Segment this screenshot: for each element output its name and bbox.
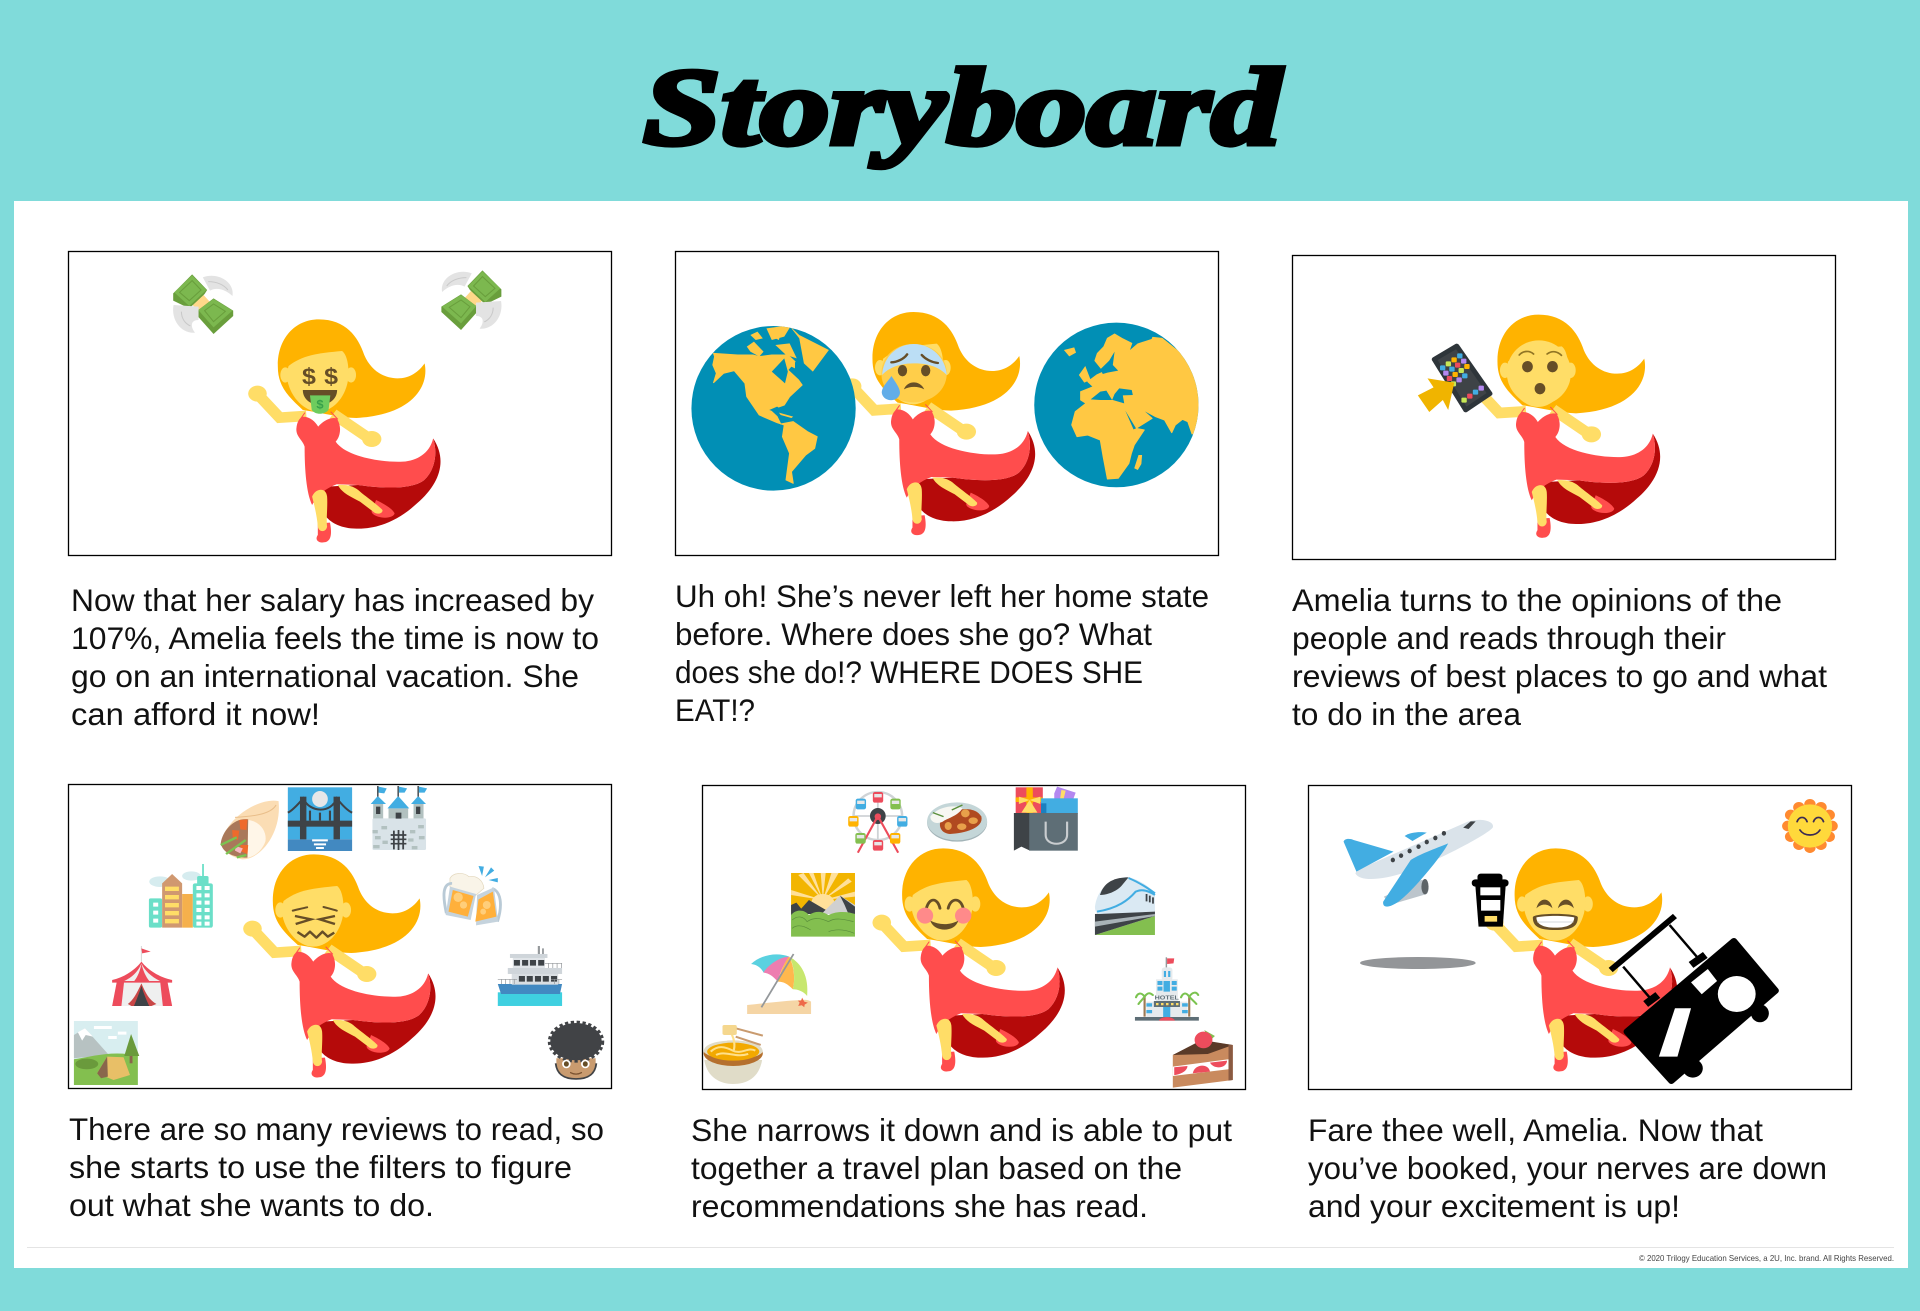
caption: step 1: 107%, Amelia feels the time is now to [71,620,599,656]
icon: night bridge [288,787,352,851]
icon: royal guard [550,1023,602,1079]
frame: step 6 [1308,786,1852,1090]
caption: step 1: go on an international vacation. She [71,658,579,694]
caption: step 3 [1292,582,1827,732]
icon: clinking beer mugs [444,866,500,925]
illustration: dancer with money eyes and flying money: $ [302,364,316,390]
illustration: worried dancer and two globes [691,312,1206,535]
icon: strawberry cake [1173,1030,1233,1088]
title: Storyboard [643,46,1284,168]
caption: step 4: out what she wants to do. [69,1187,434,1223]
icon: airplane taking off [1344,820,1493,907]
illustration: surprised dancer with phone and cursor arrow [1418,315,1660,538]
icon: hotel: HOTEL [1155,995,1179,1001]
caption: step 1: can afford it now! [71,696,320,732]
icon: noodle bowl [704,1025,763,1084]
footer copyright: © 2020 Trilogy Education Services, a 2U, Inc. brand. All Rights Reserved. [1639,1253,1894,1263]
caption: step 5 [691,1112,1232,1224]
caption: step 6: and your excitement is up! [1308,1188,1680,1224]
icon: plane shadow [1360,957,1476,969]
frame: step 3 [1292,256,1836,560]
caption: step 1: Now that her salary has increased by [71,582,594,618]
frame: step 2 [676,252,1218,556]
icon: circus tent [112,946,172,1006]
illustration: dancer with money eyes and flying money: $ [316,398,324,412]
caption: step 5: She narrows it down and is able to put [691,1112,1232,1148]
icon: globe showing the Americas [691,325,856,491]
panel: step 3 reading reviews on phone [1292,256,1836,732]
illustration: excited dancer with coffee, suitcase, plane and sun [1344,799,1838,1081]
icon: hotel [1135,957,1199,1021]
panel: step 1 salary increase [68,252,612,732]
icon: plate of curry [927,802,987,842]
frame: step 1 [68,252,612,556]
icon: smartphone [1434,346,1490,410]
caption: step 6 [1308,1112,1827,1224]
illustration: dancer with money eyes and flying money: $ [324,364,339,390]
icon: cursor arrow [1418,378,1454,412]
icon: ferry ship [498,946,562,1006]
icon: takeaway coffee cup [1472,874,1509,927]
caption: step 4 [69,1111,604,1223]
caption: step 2: EAT!? [675,692,755,728]
caption: step 4: she starts to use the filters to figure [69,1149,572,1185]
caption: step 1 [71,582,599,732]
caption: step 5: together a travel plan based on the [691,1150,1182,1186]
icon: cityscape [149,864,213,928]
icon: smiling sun [1782,799,1838,853]
icon: sunrise over mountains [791,873,855,937]
caption: step 2: Uh oh! She’s never left her home state [675,578,1209,614]
caption: step 5: recommendations she has read. [691,1188,1148,1224]
caption: step 2: does she do!? WHERE DOES SHE [675,654,1143,690]
caption: step 2: before. Where does she go? What [675,616,1152,652]
caption: step 3: to do in the area [1292,696,1521,732]
illustration: overwhelmed dancer surrounded by options [74,786,602,1085]
caption: step 6: you’ve booked, your nerves are down [1308,1150,1827,1186]
frame: step 4 [68,784,612,1088]
caption: step 3: people and reads through their [1292,620,1726,656]
panel: step 2 worried between globes [675,252,1218,728]
icon: beach umbrella [747,954,811,1014]
icon: shopping bag with gifts [1014,787,1078,851]
caption: step 6: Fare thee well, Amelia. Now that [1308,1112,1763,1148]
icon: globe showing Europe and Africa [1034,323,1206,487]
icon: burrito [221,801,279,859]
illustration: happy dancer surrounded by plan items [704,787,1233,1088]
caption: step 2 [675,578,1209,728]
icon: ferris wheel [848,792,907,853]
caption: step 4: There are so many reviews to read, so [69,1111,604,1147]
icon: bullet train [1095,877,1155,935]
caption: step 3: reviews of best places to go and what [1292,658,1827,694]
panel: step 5 narrowing it down [691,786,1246,1224]
panel: step 6 booked and departing [1308,786,1852,1224]
caption: step 3: Amelia turns to the opinions of the [1292,582,1782,618]
icon: rolling suitcase [1611,916,1776,1081]
icon: castle [371,786,427,850]
frame: step 5 [702,786,1246,1090]
panel: step 4 overwhelmed by reviews [68,784,612,1223]
illustration: dancer with money eyes and flying money [173,270,501,542]
icon: camping scene [74,1021,139,1085]
